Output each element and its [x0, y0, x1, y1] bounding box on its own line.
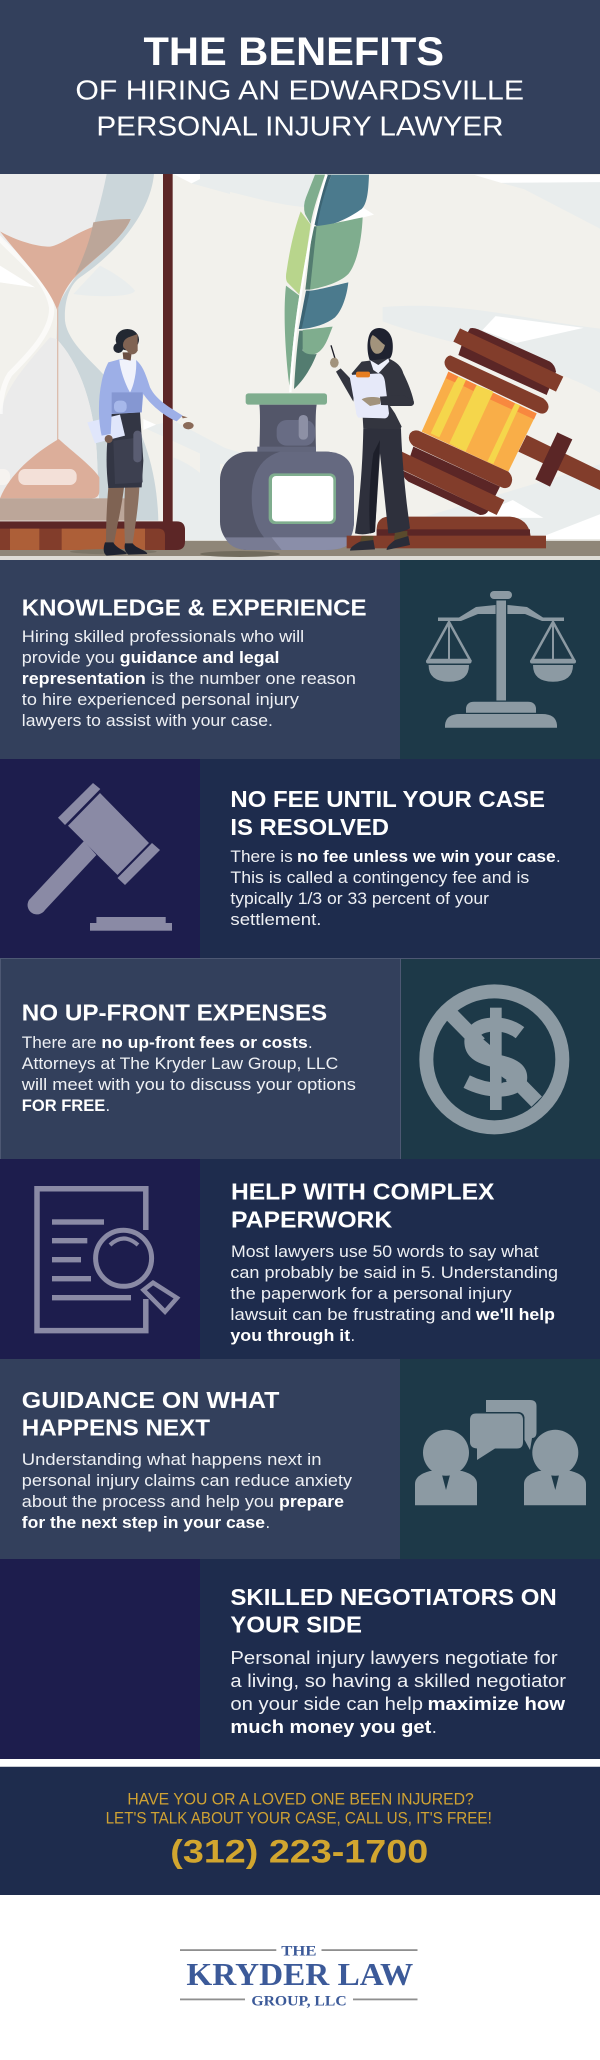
hero illustration	[0, 174, 600, 560]
body text: .	[432, 1716, 437, 1737]
body text: There are	[22, 1034, 96, 1052]
icon: scales of justice	[426, 591, 576, 728]
woman with blue blouse	[87, 329, 194, 556]
body text: to hire experienced personal injury	[22, 691, 300, 709]
body text: Understanding what happens next in	[22, 1451, 322, 1469]
body text: personal injury claims can reduce anxiety	[22, 1472, 353, 1490]
panel: skilled negotiators	[0, 1559, 600, 1759]
phone number: (312) 223-1700	[170, 1834, 428, 1870]
body text: prepare	[279, 1493, 344, 1511]
woman in dark suit	[330, 328, 414, 551]
body text: lawsuit can be frustrating and	[230, 1306, 472, 1324]
heading line 2: YOUR SIDE	[230, 1612, 362, 1638]
panel: knowledge and experience	[0, 560, 600, 759]
heading: SKILLED NEGOTIATORS ON	[230, 1584, 557, 1610]
logo: The Kryder Law Group, LLC: THE	[281, 1944, 316, 1960]
body text	[22, 628, 356, 730]
quill feather and ink bottle	[200, 174, 374, 557]
icon: two people talking	[415, 1400, 586, 1505]
body text: representation	[22, 670, 146, 688]
body text	[22, 1451, 353, 1532]
body text: we'll help	[475, 1306, 555, 1324]
heading: GUIDANCE ON WHAT	[22, 1387, 280, 1413]
heading line 2: HAPPENS NEXT	[22, 1415, 211, 1441]
body text: .	[106, 1097, 110, 1115]
body text	[230, 1243, 558, 1345]
logo: The Kryder Law Group, LLC	[180, 1944, 418, 2010]
body text	[21, 1034, 356, 1115]
body text: much money you get	[230, 1716, 431, 1737]
body text: Personal injury lawyers negotiate for	[230, 1647, 558, 1668]
subtitle line 2: PERSONAL INJURY LAWYER	[96, 111, 504, 142]
panel: no fee until resolved	[0, 759, 600, 959]
body text: settlement.	[230, 911, 322, 929]
body text: is the number one reason	[151, 670, 356, 688]
call to action line 2: LET'S TALK ABOUT YOUR CASE, CALL US, IT'S FREE!	[106, 1809, 492, 1828]
logo: The Kryder Law Group, LLC: KRYDER LAW	[186, 1956, 413, 1992]
body text: There is	[230, 848, 293, 866]
heading: HELP WITH COMPLEX	[231, 1178, 495, 1204]
title: THE BENEFITS	[144, 30, 444, 74]
subtitle line 1: OF HIRING AN EDWARDSVILLE	[75, 74, 524, 105]
body text	[230, 848, 561, 929]
body text: a living, so having a skilled negotiator	[230, 1670, 566, 1691]
panel: no up-front expenses	[0, 958, 600, 1159]
body text: .	[556, 848, 561, 866]
body text: typically 1/3 or 33 percent of your	[230, 890, 490, 908]
body text: This is called a contingency fee and is	[230, 869, 529, 887]
body text: no fee unless we win your case	[297, 848, 556, 866]
body text: .	[266, 1514, 270, 1532]
body text: no up-front fees or costs	[101, 1034, 308, 1052]
body text: can probably be said in 5. Understanding	[230, 1264, 558, 1282]
call to action line 1: HAVE YOU OR A LOVED ONE BEEN INJURED?	[127, 1790, 474, 1809]
icon: document with magnifier	[37, 1189, 177, 1331]
body text: .	[308, 1034, 313, 1052]
body text: provide you	[22, 649, 115, 667]
logo: The Kryder Law Group, LLC: GROUP, LLC	[251, 1994, 347, 2010]
body text: Hiring skilled professionals who will	[22, 628, 304, 646]
body text: lawyers to assist with your case.	[22, 712, 273, 730]
heading: KNOWLEDGE & EXPERIENCE	[22, 594, 367, 620]
body text: .	[350, 1327, 355, 1345]
body text: Most lawyers use 50 words to say what	[231, 1243, 539, 1261]
body text: the paperwork for a personal injury	[230, 1285, 513, 1303]
body text	[230, 1647, 566, 1737]
heading line 2: IS RESOLVED	[230, 814, 389, 840]
heading line 2: PAPERWORK	[231, 1206, 392, 1232]
icon: no dollar sign	[426, 991, 562, 1127]
body text: for the next step in your case	[22, 1514, 265, 1532]
heading: NO UP-FRONT EXPENSES	[22, 1000, 327, 1026]
large gavel	[347, 328, 600, 548]
body text: will meet with you to discuss your options	[21, 1076, 356, 1094]
heading: NO FEE UNTIL YOUR CASE	[230, 786, 545, 812]
panel: complex paperwork	[0, 1159, 600, 1359]
body text: maximize how	[428, 1693, 566, 1714]
body text: about the process and help you	[22, 1493, 274, 1511]
icon: gavel	[28, 783, 172, 931]
panel: guidance on what happens next	[0, 1359, 600, 1559]
hourglass	[0, 174, 230, 554]
body text: you through it	[230, 1327, 351, 1345]
floor	[0, 540, 600, 560]
call to action banner	[0, 1766, 600, 1895]
body text: FOR FREE	[22, 1097, 105, 1115]
header banner	[0, 0, 600, 174]
background swashes	[383, 175, 600, 539]
body text: guidance and legal	[120, 649, 279, 667]
body text: Attorneys at The Kryder Law Group, LLC	[22, 1055, 338, 1073]
body text: on your side can help	[230, 1693, 423, 1714]
